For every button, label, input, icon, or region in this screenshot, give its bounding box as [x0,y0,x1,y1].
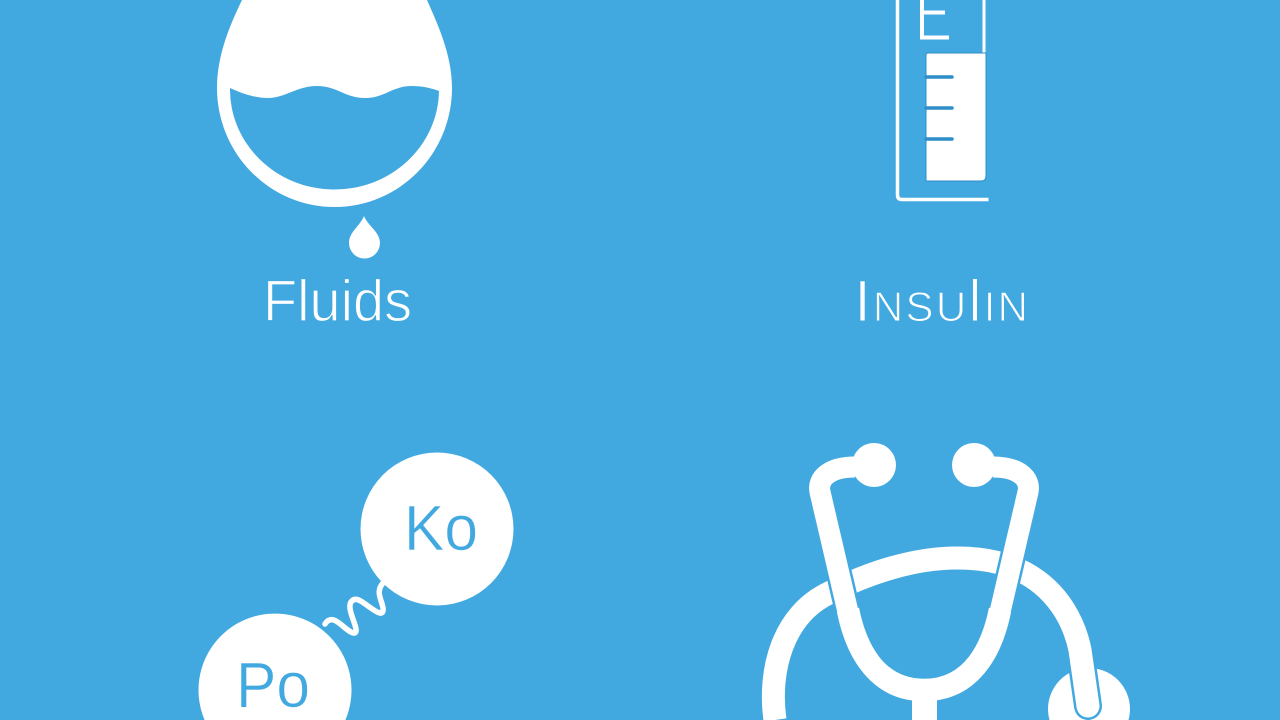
panel: monitoring [773,443,1130,720]
icon: Ko circle: Ko [404,492,478,564]
label: insulin: Insulin [854,267,1030,334]
icon: small droplet [349,216,380,258]
icon: Po circle: Po [236,649,310,720]
icon: Po circle [199,614,352,720]
panel: fluids [217,0,452,334]
icon: measuring cylinder [898,0,988,200]
icon: Ko circle [360,452,514,606]
icon: water drop [217,0,452,207]
label: fluids: Fluids [263,269,412,334]
panel: insulin [854,0,1030,334]
icon: spring connector [325,583,383,633]
panel: electrolytes [199,452,514,720]
icon: stethoscope [773,443,1130,720]
